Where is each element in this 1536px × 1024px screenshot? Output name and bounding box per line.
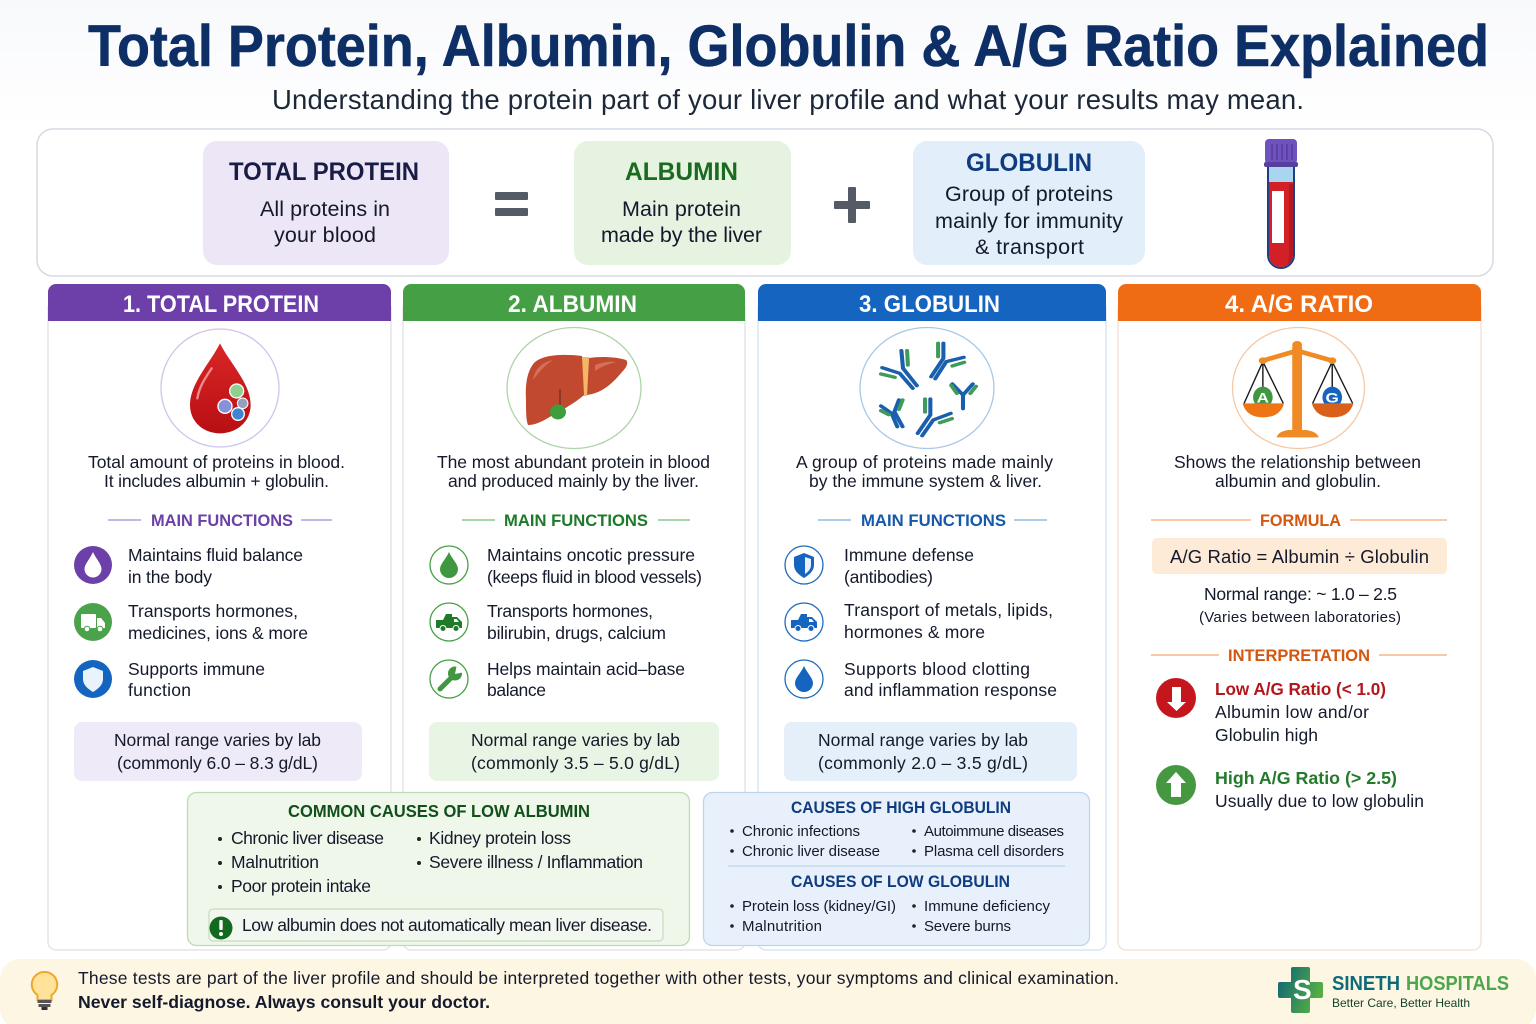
callout: causes of globulin changes: Protein loss (kidney/GI) bbox=[742, 898, 896, 915]
icon: liver bbox=[507, 328, 641, 448]
callout: causes of globulin changes: CAUSES OF HIGH GLOBULIN bbox=[791, 799, 1011, 817]
normal range: total protein: (commonly 6.0 – 8.3 g/dL) bbox=[117, 753, 318, 773]
function: transport: bilirubin, drugs, calcium bbox=[487, 623, 666, 643]
panel: total protein bbox=[48, 284, 391, 950]
equation box: total protein: TOTAL PROTEIN bbox=[229, 158, 419, 186]
heading: interpretation: INTERPRETATION bbox=[1228, 647, 1370, 665]
description: A group of proteins made mainly bbox=[796, 452, 1053, 472]
function: fluid balance: in the body bbox=[128, 567, 212, 587]
function: transport: Transports hormones, bbox=[128, 601, 298, 621]
description: Total amount of proteins in blood. bbox=[88, 452, 345, 472]
function: transport bbox=[74, 601, 308, 643]
equation box: globulin bbox=[913, 141, 1145, 265]
header: globulin: 3. GLOBULIN bbox=[859, 291, 1000, 318]
equation box: globulin: mainly for immunity bbox=[935, 209, 1123, 233]
header: total protein bbox=[48, 284, 391, 321]
function: transport: medicines, ions & more bbox=[128, 623, 308, 643]
function: oncotic pressure: Maintains oncotic pressure bbox=[487, 545, 695, 565]
normal range: albumin: Normal range varies by lab bbox=[471, 730, 680, 750]
callout: causes of low albumin: Kidney protein loss bbox=[429, 828, 571, 848]
function: acid-base balance: Helps maintain acid–base bbox=[487, 659, 685, 679]
heading: formula: FORMULA bbox=[1260, 512, 1341, 530]
icon: balance scale: G bbox=[1326, 391, 1339, 406]
description: albumin and globulin. bbox=[1215, 471, 1381, 491]
equation box: total protein: All proteins in bbox=[260, 197, 390, 221]
normal range: A/G ratio: (Varies between laboratories) bbox=[1199, 609, 1401, 626]
equals sign bbox=[495, 192, 528, 216]
panel: A/G ratio bbox=[1118, 284, 1481, 950]
icon: antibodies bbox=[860, 328, 994, 448]
callout: causes of globulin changes: Malnutrition bbox=[742, 918, 822, 935]
normal range: total protein bbox=[74, 722, 362, 781]
header: A/G ratio: 4. A/G RATIO bbox=[1225, 291, 1373, 318]
callout: causes of globulin changes: Immune deficiency bbox=[924, 898, 1050, 915]
footer note: Never self-diagnose. Always consult your doctor. bbox=[78, 992, 490, 1012]
note: low albumin bbox=[209, 909, 663, 941]
callout: causes of globulin changes: Autoimmune diseases bbox=[924, 823, 1064, 840]
interpretation: low ratio: Globulin high bbox=[1215, 725, 1318, 745]
header: A/G ratio bbox=[1118, 284, 1481, 321]
function: immune: function bbox=[128, 680, 191, 700]
interpretation: low ratio bbox=[1156, 678, 1386, 745]
icon: light bulb bbox=[32, 972, 57, 1010]
subtitle: Understanding the protein part of your liver profile and what your results may mean. bbox=[272, 84, 1304, 115]
callout: causes of globulin changes: Chronic infections bbox=[742, 823, 860, 840]
equation box: total protein: your blood bbox=[274, 223, 376, 247]
normal range: A/G ratio: Normal range: ~ 1.0 – 2.5 bbox=[1204, 584, 1397, 604]
callout: causes of globulin changes: Plasma cell disorders bbox=[924, 843, 1064, 860]
description: by the immune system & liver. bbox=[809, 471, 1042, 491]
function: immune bbox=[74, 659, 265, 700]
description: Shows the relationship between bbox=[1174, 452, 1421, 472]
interpretation: high ratio: High A/G Ratio (> 2.5) bbox=[1215, 768, 1397, 788]
function: blood clotting: Supports blood clotting bbox=[844, 659, 1030, 679]
normal range: globulin: Normal range varies by lab bbox=[818, 730, 1028, 750]
panel: globulin bbox=[758, 284, 1106, 950]
plus sign bbox=[834, 187, 870, 223]
logo: Sineth Hospitals: HOSPITALS bbox=[1406, 973, 1509, 995]
callout: causes of low albumin: Severe illness / Inflammation bbox=[429, 852, 643, 872]
function: transport: Transports hormones, bbox=[487, 601, 653, 621]
heading: main functions: MAIN FUNCTIONS bbox=[151, 512, 293, 530]
footer note: These tests are part of the liver profile and should be interpreted together with other tests, your symptoms and clinical examination. bbox=[78, 968, 1119, 988]
function: oncotic pressure bbox=[430, 545, 702, 587]
logo: Sineth Hospitals: Better Care, Better Health bbox=[1332, 996, 1470, 1010]
function: transport: hormones & more bbox=[844, 622, 985, 642]
callout: causes of globulin changes bbox=[704, 792, 1090, 946]
equation box: albumin: ALBUMIN bbox=[625, 158, 738, 186]
function: fluid balance: Maintains fluid balance bbox=[128, 545, 303, 565]
function: immune defense: (antibodies) bbox=[844, 567, 933, 587]
description bbox=[437, 452, 710, 491]
normal range: A/G ratio bbox=[1199, 584, 1401, 626]
equation box: albumin: Main protein bbox=[622, 197, 741, 221]
callout: causes of low albumin: Chronic liver disease bbox=[231, 828, 384, 848]
equation box: globulin: & transport bbox=[975, 235, 1084, 259]
header: albumin: 2. ALBUMIN bbox=[508, 291, 637, 318]
interpretation: high ratio bbox=[1156, 765, 1424, 811]
normal range: albumin: (commonly 3.5 – 5.0 g/dL) bbox=[471, 753, 680, 773]
function: transport: Transport of metals, lipids, bbox=[844, 600, 1053, 620]
function: transport bbox=[430, 601, 666, 643]
function: blood clotting bbox=[785, 659, 1057, 700]
description bbox=[796, 452, 1053, 491]
function: oncotic pressure: (keeps fluid in blood vessels) bbox=[487, 567, 702, 587]
header: globulin bbox=[758, 284, 1106, 321]
interpretation: high ratio: Usually due to low globulin bbox=[1215, 791, 1424, 811]
formula box bbox=[1152, 538, 1447, 574]
callout: causes of low albumin: Poor protein intake bbox=[231, 876, 371, 896]
description bbox=[1174, 452, 1421, 491]
callout: causes of globulin changes: CAUSES OF LOW GLOBULIN bbox=[791, 873, 1010, 891]
panel: albumin bbox=[403, 284, 745, 950]
equation box: total protein bbox=[203, 141, 449, 265]
header: total protein: 1. TOTAL PROTEIN bbox=[123, 291, 319, 318]
description: The most abundant protein in blood bbox=[437, 452, 710, 472]
equation box: albumin bbox=[574, 141, 791, 265]
icon: blood drop with proteins bbox=[161, 329, 279, 447]
normal range: total protein: Normal range varies by lab bbox=[114, 730, 321, 750]
callout: causes of low albumin bbox=[188, 792, 690, 946]
function: immune defense: Immune defense bbox=[844, 545, 974, 565]
icon: blood tube bbox=[1264, 139, 1298, 268]
interpretation: low ratio: Low A/G Ratio (< 1.0) bbox=[1215, 679, 1386, 699]
logo: Sineth Hospitals bbox=[1278, 967, 1509, 1013]
function: transport bbox=[785, 600, 1053, 642]
callout: causes of globulin changes: Severe burns bbox=[924, 918, 1011, 935]
function: immune: Supports immune bbox=[128, 659, 265, 679]
description: and produced mainly by the liver. bbox=[448, 471, 699, 491]
callout: causes of low albumin: COMMON CAUSES OF LOW ALBUMIN bbox=[288, 801, 590, 821]
footer band bbox=[0, 959, 1536, 1024]
normal range: globulin bbox=[784, 722, 1077, 781]
function: immune defense bbox=[785, 545, 974, 587]
equation box: albumin: made by the liver bbox=[601, 223, 762, 247]
interpretation: low ratio: Albumin low and/or bbox=[1215, 702, 1369, 722]
normal range: albumin bbox=[429, 722, 719, 781]
heading: main functions: MAIN FUNCTIONS bbox=[504, 512, 648, 530]
equation box: globulin: GLOBULIN bbox=[966, 149, 1092, 177]
description bbox=[88, 452, 345, 491]
callout: causes of globulin changes: Chronic liver disease bbox=[742, 843, 880, 860]
icon: balance scale bbox=[1232, 328, 1364, 448]
callout: causes of low albumin: Malnutrition bbox=[231, 852, 319, 872]
description: It includes albumin + globulin. bbox=[104, 471, 329, 491]
function: acid-base balance: balance bbox=[487, 680, 546, 700]
normal range: globulin: (commonly 2.0 – 3.5 g/dL) bbox=[818, 753, 1028, 773]
icon: balance scale: A bbox=[1257, 391, 1269, 406]
formula box: A/G Ratio = Albumin ÷ Globulin bbox=[1170, 546, 1429, 567]
footer note bbox=[78, 968, 1119, 1012]
header: albumin bbox=[403, 284, 745, 321]
logo: Sineth Hospitals: S bbox=[1293, 974, 1312, 1005]
logo: Sineth Hospitals: SINETH bbox=[1332, 973, 1400, 995]
note: low albumin: Low albumin does not automatically mean liver disease. bbox=[242, 915, 652, 935]
panel: protein equation bbox=[37, 129, 1493, 276]
heading: main functions: MAIN FUNCTIONS bbox=[861, 512, 1006, 530]
function: blood clotting: and inflammation response bbox=[844, 680, 1057, 700]
function: acid-base balance bbox=[430, 659, 685, 700]
equation box: globulin: Group of proteins bbox=[945, 182, 1113, 206]
function: fluid balance bbox=[74, 545, 303, 587]
